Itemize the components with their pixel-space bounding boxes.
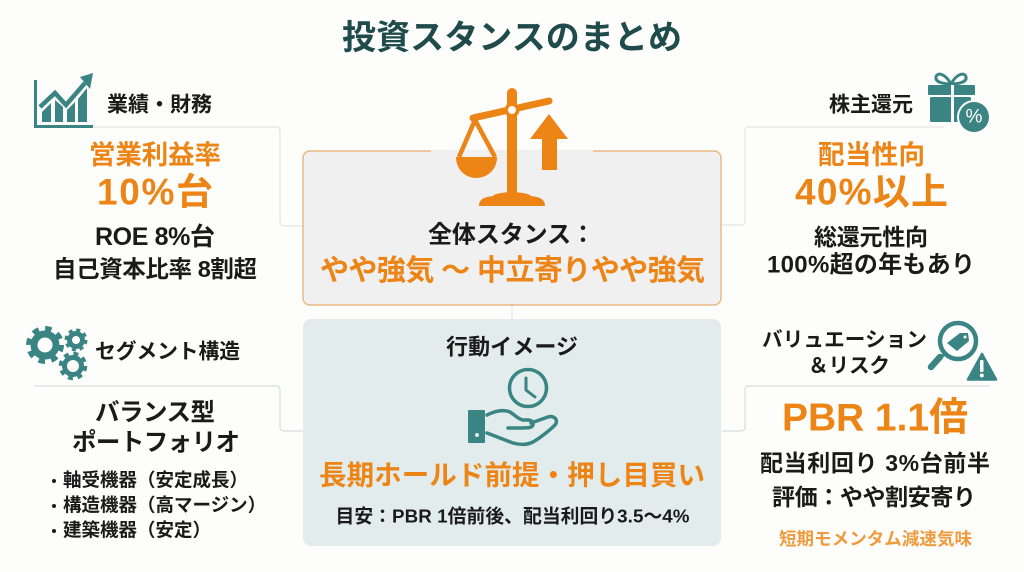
icon: balance scale with up arrow [456, 88, 568, 206]
text: ポートフォリオ: ポートフォリオ [72, 428, 240, 456]
panel: 株主還元 [767, 74, 991, 279]
panel background [303, 151, 721, 305]
metric value: PBR 1.1倍: PBR 1.1倍 [782, 396, 968, 440]
heading: バリュエーション＆リスク: バリュエーション [762, 328, 927, 352]
icon: gift with percent badge: % [966, 106, 983, 128]
panel background [303, 319, 721, 546]
panel: action image [303, 319, 721, 546]
heading: バリュエーション＆リスク [762, 328, 927, 378]
metric label: 営業利益率: 営業利益率 [89, 140, 221, 170]
heading: 行動イメージ: 行動イメージ [446, 334, 578, 360]
text: ROE 8%台: ROE 8%台 [95, 223, 215, 251]
icon: gift with percent badge [928, 74, 991, 134]
action headline: 長期ホールド前提・押し目買い [319, 460, 705, 490]
heading: 株主還元: 株主還元 [829, 94, 913, 116]
text: 100%超の年もあり: 100%超の年もあり [767, 252, 975, 278]
icon: gears [28, 328, 86, 378]
list: segments: 軸受機器（安定成長） [63, 470, 248, 490]
text: 総還元性向: 総還元性向 [814, 224, 928, 250]
stance value: やや強気 ～ 中立寄りやや強気 [320, 254, 705, 287]
text: 評価: 評価：やや割安寄り [772, 484, 976, 510]
list: segments: 建築機器（安定） [63, 520, 211, 540]
panel: overall stance [303, 88, 721, 305]
heading: セグメント構造: セグメント構造 [95, 340, 240, 364]
metric value: 10%台: 10%台 [97, 172, 213, 212]
list: segments [52, 470, 266, 540]
text: バランス型: バランス型 [95, 398, 215, 426]
risk note: 短期モメンタム減速気味 [779, 529, 972, 549]
heading: バリュエーション＆リスク: ＆リスク [808, 354, 890, 378]
icon: clock over open hand [468, 370, 556, 444]
panel: セグメント構造 [28, 328, 266, 540]
text: 全体スタンス: 全体スタンス： [428, 222, 595, 248]
icon: magnifier with tag and warning [931, 323, 996, 380]
icon: growth chart [34, 73, 93, 128]
list: segments: 構造機器（高マージン） [63, 494, 266, 516]
title: 投資スタンスのまとめ [342, 19, 682, 57]
panel: バリュエーション＆リスク [760, 323, 996, 549]
text: 配当利回り: 配当利回り 3%台前半 [760, 450, 990, 476]
action guideline: 目安：PBR 1倍前後、配当利回り3.5～4% [336, 506, 690, 526]
text: 自己資本比率 8割超: 自己資本比率 8割超 [53, 256, 258, 282]
metric label: 配当性向: 配当性向 [818, 140, 925, 170]
metric value: 40%以上: 40%以上 [795, 172, 948, 212]
panel: 業績・財務 [34, 73, 258, 282]
heading: 業績・財務: 業績・財務 [107, 94, 212, 116]
